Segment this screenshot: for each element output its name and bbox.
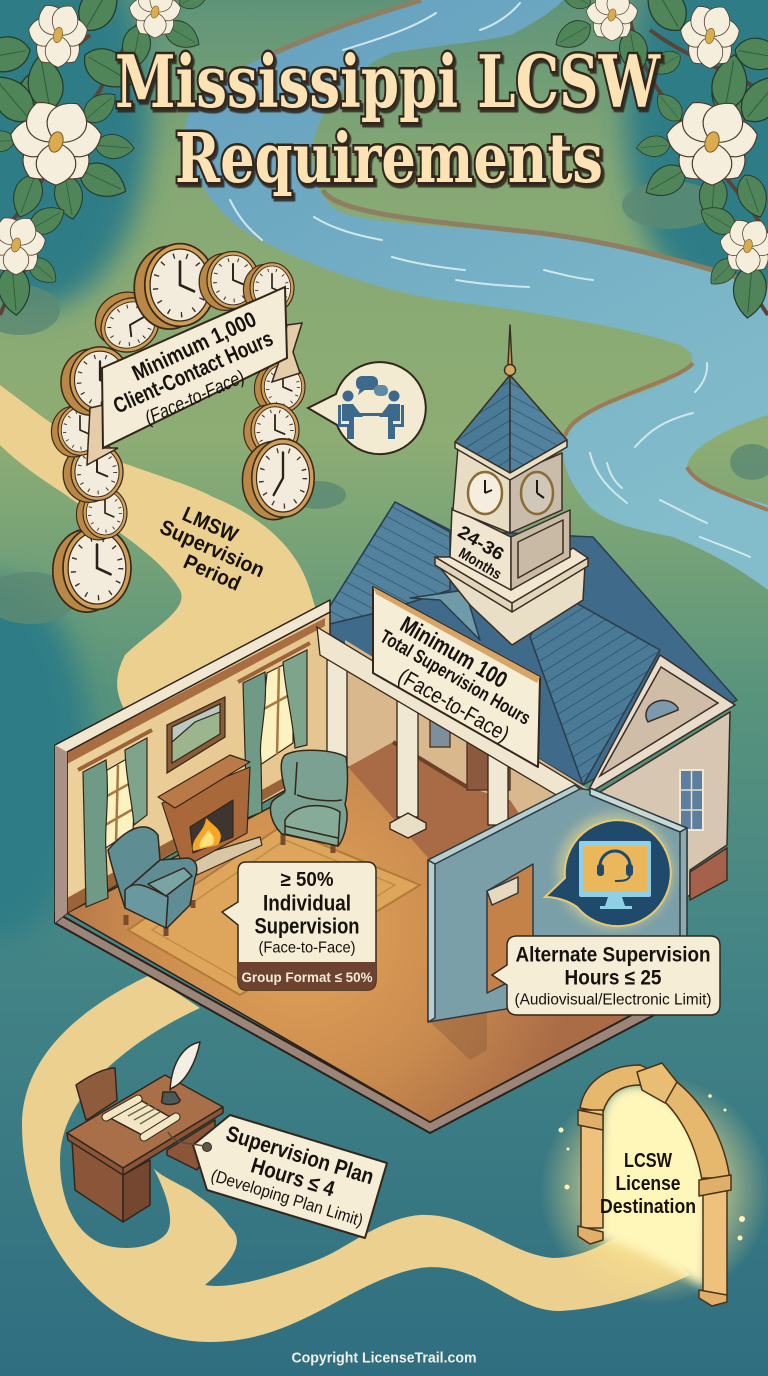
armchair right (270, 750, 348, 853)
right window and curtains (238, 643, 310, 818)
inkwell (162, 1092, 180, 1104)
left wall (67, 612, 330, 913)
building (317, 325, 737, 950)
desk with scroll and quill (67, 1042, 223, 1222)
sparkles (558, 1094, 745, 1240)
icon: face-to-face speech bubble (308, 362, 426, 454)
callout: individual supervision: ≥ 50% (280, 869, 334, 891)
ribbon banner: Minimum 1,000 (128, 306, 260, 386)
right clock column (242, 362, 314, 520)
LMSW Supervision Period path label: LMSW (179, 503, 241, 547)
rug (128, 827, 420, 995)
magnolia flowers left (0, 0, 182, 277)
magnolia branches right (550, 0, 768, 319)
callout: individual supervision: Individual (263, 890, 351, 916)
destination arch: LCSW (624, 1150, 672, 1172)
ribbon banner (87, 287, 302, 465)
callout: alternate supervision hours (492, 936, 720, 1015)
floor slab (55, 912, 660, 1133)
icon: audiovisual monitor bubble (545, 813, 673, 929)
lower sand path (22, 975, 690, 1342)
scroll (110, 1100, 172, 1136)
interior back wall (345, 640, 590, 860)
armchair left (108, 827, 197, 936)
hang tag: supervision plan hours: (Developing Plan Limit) (209, 1166, 365, 1230)
left window and curtains (78, 730, 152, 907)
hang tag: supervision plan hours (168, 1115, 387, 1238)
quill (170, 1042, 200, 1090)
tower months label: Months (455, 545, 505, 583)
porch columns (317, 627, 597, 920)
ribbon banner: Client-Contact Hours (109, 326, 277, 418)
callout: alternate supervision hours: Alternate Supervision (516, 944, 710, 966)
room cutaway (55, 600, 660, 1133)
clock arch with banner (51, 244, 314, 612)
LMSW Supervision Period path label: Period (180, 550, 244, 596)
fireplace (158, 755, 262, 875)
floor shadow by partition (428, 993, 487, 1060)
top clock arc (86, 244, 294, 363)
copyright footer: Copyright LicenseTrail.com (292, 1350, 476, 1366)
river (186, 0, 768, 590)
island and tree shadows (0, 181, 768, 624)
tower months label (454, 522, 508, 583)
hang tag: supervision plan hours: Hours ≤ 4 (248, 1152, 338, 1202)
magnolia flowers right (585, 0, 768, 276)
corner tree shade (0, 0, 768, 940)
painting (167, 697, 225, 773)
callout: individual supervision: Group Format ≤ 50% (242, 969, 373, 985)
upper sand path (0, 385, 325, 725)
callout: alternate supervision hours: Hours ≤ 25 (564, 966, 662, 990)
callout: alternate supervision hours: (Audiovisual/Electronic Limit) (514, 992, 712, 1008)
interior door and window (430, 720, 510, 790)
callout: individual supervision: Supervision (254, 914, 360, 938)
callout: individual supervision (222, 862, 376, 990)
title: Requirements (175, 119, 603, 199)
ribbon banner: (Face-to-Face) (142, 367, 248, 429)
title (115, 39, 661, 199)
tower months label: 24-36 (454, 522, 508, 564)
sign: minimum 100 total supervision hours: (Face-to-Face) (394, 663, 514, 747)
desk (72, 1140, 123, 1222)
sign: minimum 100 total supervision hours (373, 587, 540, 767)
callout: individual supervision: (Face-to-Face) (258, 940, 356, 956)
magnolia branches left (0, 0, 214, 317)
floor (67, 767, 650, 1122)
main roof (317, 502, 737, 785)
hang tag: supervision plan hours: Supervision Plan (223, 1121, 377, 1189)
sign: minimum 100 total supervision hours: Total Supervision Hours (376, 626, 534, 730)
destination arch (540, 1063, 768, 1306)
partition wall with doorway (428, 785, 687, 1022)
right gable and wall (586, 655, 735, 950)
destination arch: Destination (600, 1196, 696, 1218)
left clock column (51, 347, 131, 612)
sign: minimum 100 total supervision hours: Minimum 100 (396, 611, 512, 693)
clock tower (435, 325, 588, 645)
destination arch: License (616, 1173, 680, 1195)
LMSW Supervision Period path label: Supervision (156, 516, 268, 582)
chair (76, 1068, 117, 1120)
